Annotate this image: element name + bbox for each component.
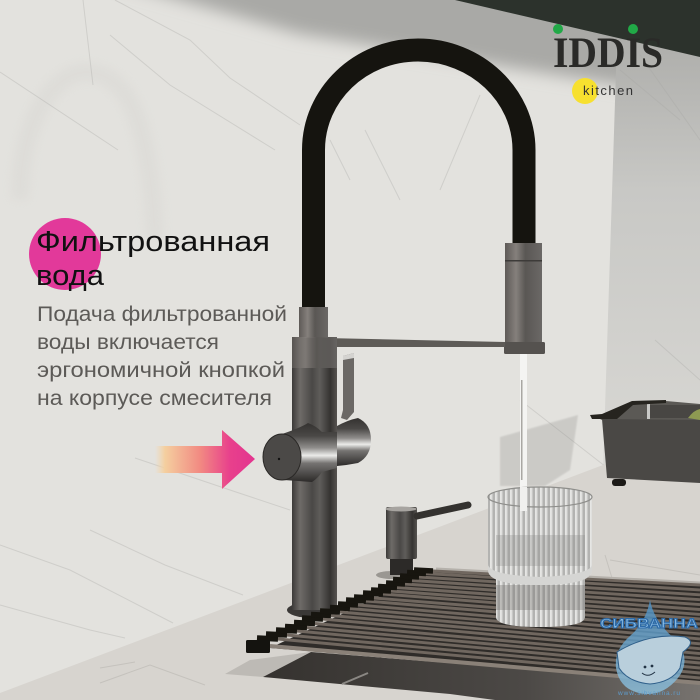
- body text: на корпусе смесителя: [37, 387, 272, 410]
- brand name: IDDIS: [553, 30, 663, 77]
- horizontal spout bar: [325, 338, 505, 347]
- body text: воды включается: [37, 331, 219, 354]
- pink circle accent: [29, 218, 101, 290]
- sink basin: [225, 652, 700, 700]
- drying rack: [246, 569, 700, 683]
- black flexible hose: [314, 50, 524, 310]
- sprayer head: [504, 243, 545, 354]
- lever handle: [341, 353, 354, 420]
- wall shadow from tray: [500, 415, 578, 486]
- body text: Подача фильтрованной: [37, 303, 287, 326]
- heading: Фильтрованная: [36, 226, 270, 258]
- rack rods: [270, 571, 700, 683]
- rack black end caps: [257, 570, 433, 639]
- water drop: [616, 600, 685, 694]
- water stream: [520, 354, 527, 488]
- pink gradient arrow: [155, 430, 255, 489]
- soap dispenser: [376, 505, 468, 579]
- website: www.sibvanna.ru: [617, 690, 680, 697]
- dark green ceiling: [455, 0, 700, 57]
- tray on the counter: [590, 400, 700, 486]
- logo: IDDIS kitchen: [553, 24, 663, 104]
- green dots: [553, 24, 638, 34]
- button face: [263, 434, 301, 480]
- body text: [37, 303, 287, 410]
- watermark: Сибванна: [600, 600, 698, 697]
- fluted glass: [488, 487, 592, 627]
- yellow circle: [572, 78, 598, 104]
- brand text: СИБВАННА: [600, 615, 698, 631]
- faucet body pipe: [287, 307, 337, 618]
- bathtub: [617, 636, 691, 684]
- kitchen label: kitchen: [583, 83, 633, 98]
- right cylinder: [337, 418, 371, 466]
- heading: вода: [36, 260, 105, 292]
- kitchen counter: [0, 430, 700, 700]
- bathtub face: [642, 665, 655, 675]
- body text: эргономичной кнопкой: [37, 359, 285, 382]
- filter button cylinder: [263, 423, 337, 482]
- faucet: [263, 50, 545, 618]
